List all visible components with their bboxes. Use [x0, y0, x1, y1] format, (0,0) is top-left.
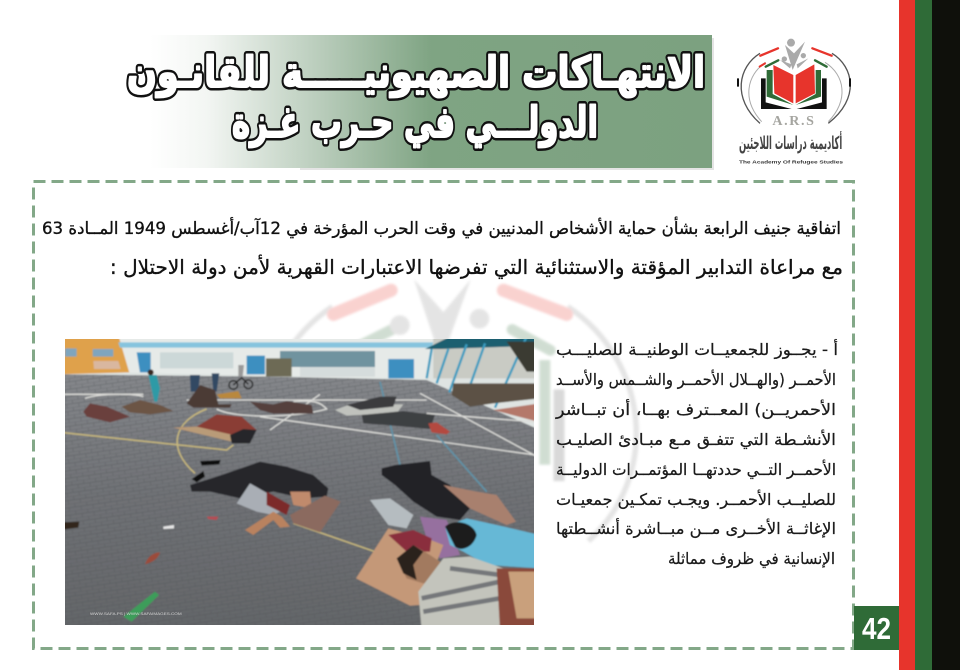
title line 1: الانتهـاكات الصهيونيـــــة للقانـون [127, 48, 705, 98]
paragraph: article text: الإغاثــة الأخــرى مــن مبــاشرة أنشــطتها [556, 518, 836, 539]
logo caption: The Academy Of Refugee Studies [739, 160, 844, 165]
paragraph: article text: للصليــب الأحمــر. ويجـب تمكـين جمعيـات [556, 489, 836, 510]
ground [60, 374, 540, 630]
background watermark logo [263, 279, 636, 541]
logo: Academy of Refugee Studies [738, 39, 850, 165]
photo: displaced people sleeping in a school yard [60, 335, 540, 630]
title banner [127, 35, 714, 170]
dashed content frame [34, 182, 854, 648]
side stripe: red [899, 0, 915, 670]
subheading line: مع مراعاة التدابير المؤقتة والاستثنائية التي تفرضها الاعتبارات القهرية لأمن دولة الاحتلال : [110, 255, 843, 280]
distant sleepers [83, 403, 130, 422]
paragraph: article text [555, 339, 838, 569]
title line 2: الدولـــي في حـرب غـزة [232, 98, 598, 148]
title line 1: الانتهـاكات الصهيونيـــــة للقانـون [127, 48, 705, 98]
page number box [854, 606, 899, 650]
logo letters: A.R.S [772, 114, 816, 129]
paragraph: article text: الأنشـطة التي تتفـق مـع مبـادئ الصليـب [556, 429, 836, 450]
paragraph: article text: الإنسانية في ظروف مماثلة [668, 549, 835, 569]
photo watermark caption: WWW.SAFA.PS | WWW.SAFAIMAGES.COM [90, 611, 182, 616]
paragraph: article text: الأحمــر التــي حددتهــا المؤتمــرات الدوليــة [556, 459, 836, 480]
court lines [60, 393, 540, 458]
logo: Academy of Refugee Studies: أكاديمية دراسات اللاجئين [739, 131, 842, 154]
shelter [425, 339, 534, 350]
heading line: Geneva convention article: اتفاقية جنيف الرابعة بشأن حماية الأشخاص المدنيين في وقت الحرب المؤرخة في 12آب/أغسطس 1949 المــادة 63 [42, 216, 841, 239]
page number box: 42 [862, 611, 891, 646]
paragraph: article text: الأحمريــن) المعــترف بهــا، أن تبــاشر [555, 399, 836, 420]
side stripe: green [915, 0, 932, 670]
central sleeping man and boy [190, 462, 328, 498]
orange building [65, 339, 130, 376]
side stripe: black [932, 0, 960, 670]
children and bicycle [148, 375, 160, 402]
school building [119, 339, 130, 372]
paragraph: article text: أ - يجــوز للجمعيــات الوطنيــة للصليـــب [556, 339, 838, 360]
right foreground sleepers [382, 461, 470, 520]
title line 2: الدولـــي في حـرب غـزة [232, 98, 598, 148]
paragraph: article text: الأحمــر (والهــلال الأحمــر والشــمس والأســد [556, 369, 836, 390]
